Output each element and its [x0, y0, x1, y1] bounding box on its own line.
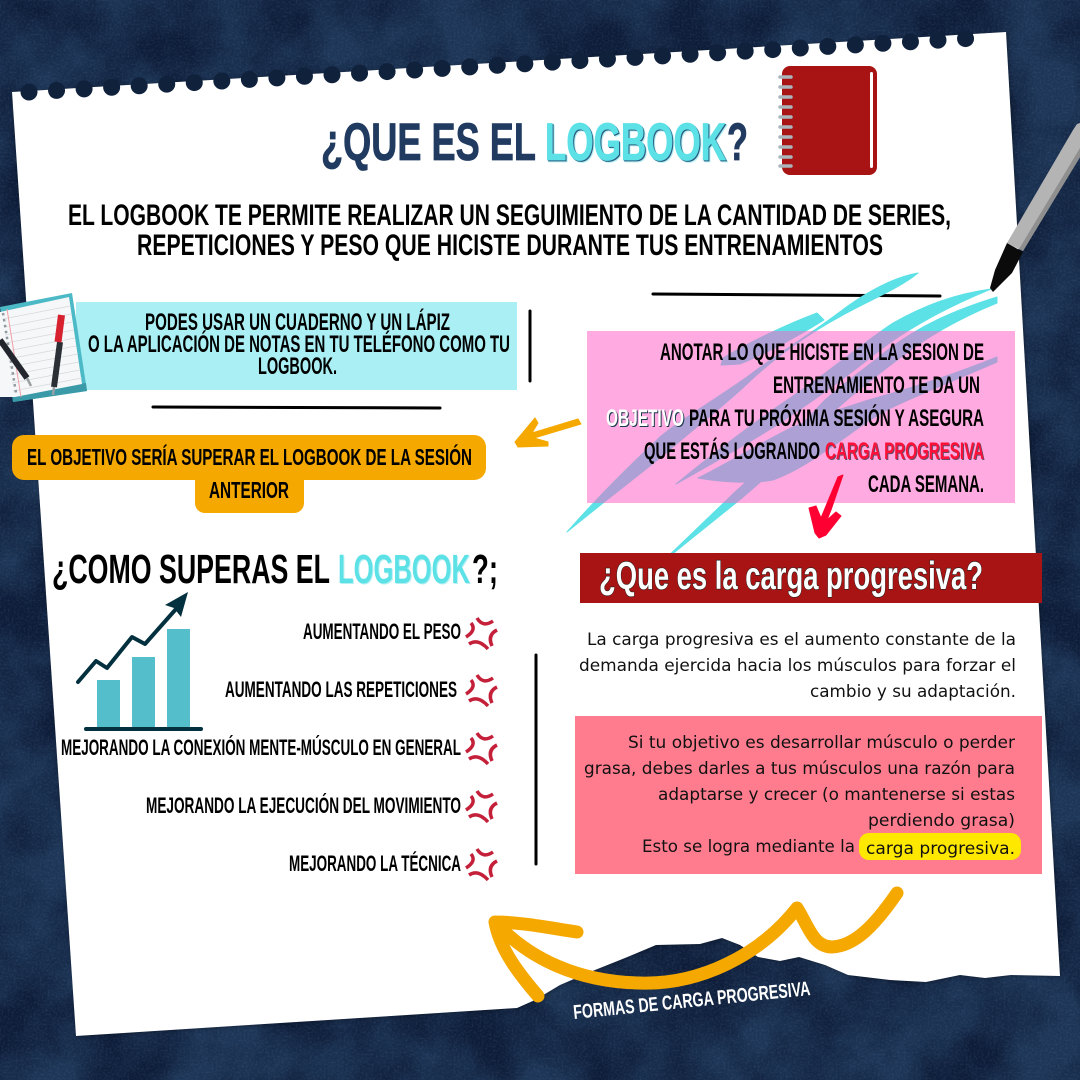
text block: definicion: demanda ejercida hacia los músculos para forzar el [579, 656, 1016, 676]
title: ? [727, 113, 748, 172]
panel: objetivo muscular: Esto se logra mediante la [642, 837, 855, 857]
text block: definicion: cambio y su adaptación. [810, 682, 1016, 702]
highlight: carga progresiva: carga progresiva. [866, 839, 1015, 859]
arrow: red [809, 475, 843, 538]
title: LOGBOOK [545, 113, 726, 172]
item: aumentando las repeticiones [225, 675, 497, 706]
title: ¿QUE ES EL [321, 113, 536, 172]
item: ejecucion del movimiento: MEJORANDO LA EJECUCIÓN DEL MOVIMIENTO [146, 793, 461, 818]
panel: objetivo muscular [575, 716, 1042, 874]
heading: como superas el logbook: ¿COMO SUPERAS EL [52, 546, 330, 592]
item: tecnica: MEJORANDO LA TÉCNICA [289, 851, 461, 876]
panel: cuaderno tip: PODES USAR UN CUADERNO Y UN LÁPIZ [145, 308, 450, 336]
icon: pen [990, 123, 1080, 292]
item: aumentando el peso: AUMENTANDO EL PESO [303, 619, 461, 644]
highlight: carga progresiva [859, 833, 1021, 860]
panel: objetivo muscular: Si tu objetivo es desarrollar músculo o perder [628, 733, 1015, 753]
item: aumentando el peso [303, 618, 497, 649]
heading: como superas el logbook: LOGBOOK [338, 546, 470, 592]
item: aumentando las repeticiones: AUMENTANDO LAS REPETICIONES [225, 677, 457, 702]
panel: objetivo muscular: perdiendo grasa) [868, 811, 1015, 831]
item: conexion mente-musculo [61, 733, 497, 764]
text block: definicion: La carga progresiva es el aumento constante de la [587, 630, 1016, 650]
divider lines [153, 294, 940, 864]
panel text: QUE ESTÁS LOGRANDO [644, 437, 820, 465]
panel: cuaderno tip: LOGBOOK. [258, 353, 337, 380]
scribble: cyan pen strokes [567, 273, 997, 564]
chart: rising bars with arrow [78, 592, 201, 729]
paper perforation holes [29, 37, 993, 92]
list: formas de superar el logbook [61, 618, 497, 880]
panel: objetivo pill: ANTERIOR [209, 477, 289, 503]
panel: cuaderno tip: O LA APLICACIÓN DE NOTAS EN TU TELÉFONO COMO TU [88, 330, 510, 358]
panel: objetivo pill [12, 435, 486, 513]
arrow: small orange [515, 418, 581, 447]
item: ejecucion del movimiento [146, 791, 497, 822]
icon: notebook with pens [0, 293, 87, 402]
subtitle [68, 199, 951, 262]
panel: anotar [587, 331, 1015, 503]
item: conexion mente-musculo: MEJORANDO LA CONEXIÓN MENTE-MÚSCULO EN GENERAL [61, 735, 461, 760]
panel text: CARGA PROGRESIVA [825, 438, 984, 465]
panel: objetivo muscular: grasa, debes darles a tus músculos una razón para [584, 759, 1015, 779]
item: tecnica [289, 849, 497, 880]
text block: definicion [579, 630, 1016, 702]
panel: objetivo pill: EL OBJETIVO SERÍA SUPERAR EL LOGBOOK DE LA SESIÓN [27, 443, 472, 470]
panel: cuaderno tip [76, 302, 517, 390]
icon: red spiral notebook [780, 66, 877, 175]
panel text [606, 339, 984, 498]
arrow: big orange curved [495, 893, 897, 996]
heading: como superas el logbook: ?; [472, 546, 498, 592]
caption: formas de carga progresiva: FORMAS DE CARGA PROGRESIVA [572, 978, 811, 1024]
panel: objetivo muscular: adaptarse y crecer (o mantenerse si estas [658, 785, 1015, 805]
scribble overlay on pink [593, 331, 998, 503]
panel text: CADA SEMANA. [868, 471, 984, 498]
panel text: OBJETIVO [606, 405, 684, 432]
